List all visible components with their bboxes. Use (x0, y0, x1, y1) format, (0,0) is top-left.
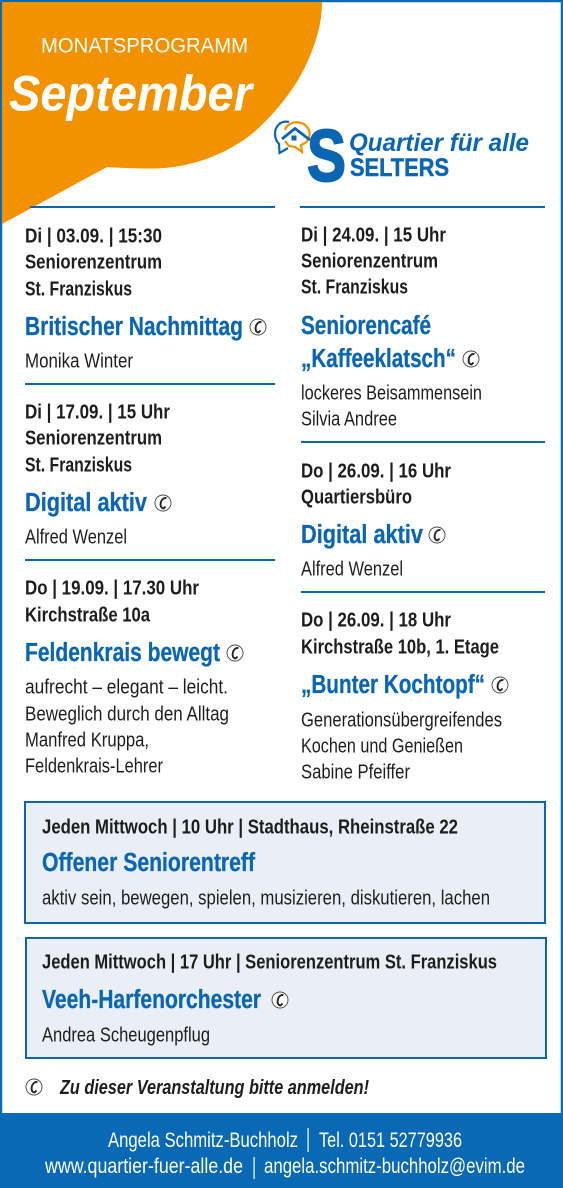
event: Seniorencafé Kaffeeklatsch: „Kaffeeklatsch“ (301, 345, 456, 373)
footer contact bar (0, 1113, 563, 1188)
logo name: Quartier für alle (349, 129, 529, 157)
logo place: SELTERS (350, 154, 449, 182)
panel: Offener Seniorentreff (25, 802, 545, 923)
registration note: Zu dieser Veranstaltung bitte anmelden! (59, 1077, 369, 1099)
panel: Offener Seniorentreff: Jeden Mittwoch | 10 Uhr | Stadthaus, Rheinstraße 22 (42, 816, 458, 838)
footer contact bar: Tel. 0151 52779936 (319, 1129, 462, 1152)
event: Bunter Kochtopf: Kirchstraße 10b, 1. Etage (301, 636, 499, 658)
event: Feldenkrais bewegt: Manfred Kruppa, (25, 729, 149, 751)
event: Seniorencafé Kaffeeklatsch: Silvia Andree (301, 408, 397, 430)
event: Seniorencafé Kaffeeklatsch: St. Franziskus (301, 276, 408, 298)
event: Britischer Nachmittag (25, 206, 275, 372)
event: Digital aktiv 26.09.: Do | 26.09. | 16 Uhr (301, 460, 451, 482)
panel: Offener Seniorentreff: Offener Seniorentreff (42, 849, 255, 877)
event: Digital aktiv 26.09.: Quartiersbüro (301, 486, 412, 508)
event: Feldenkrais bewegt: Beweglich durch den Alltag (25, 703, 229, 725)
event: Feldenkrais bewegt: Feldenkrais bewegt (25, 639, 220, 667)
event: Bunter Kochtopf: Kochen und Genießen (301, 735, 463, 757)
event: Britischer Nachmittag: Seniorenzentrum (25, 251, 162, 273)
panel: Veeh-Harfenorchester: Veeh-Harfenorchester (42, 986, 261, 1014)
event: Seniorencafé Kaffeeklatsch: Seniorencafé (301, 312, 431, 340)
event: Britischer Nachmittag: Britischer Nachmittag (25, 313, 243, 341)
event: Bunter Kochtopf (301, 591, 545, 783)
event: Bunter Kochtopf: „Bunter Kochtopf“ (301, 671, 485, 699)
event: Seniorencafé Kaffeeklatsch: lockeres Beisammensein (301, 382, 482, 404)
event: Digital aktiv 17.09. (25, 383, 275, 548)
event: Feldenkrais bewegt: aufrecht – elegant – leicht. (25, 676, 228, 698)
event: Britischer Nachmittag: Monika Winter (25, 350, 133, 372)
event: Digital aktiv 17.09.: Seniorenzentrum (25, 427, 162, 449)
event: Feldenkrais bewegt: Do | 19.09. | 17.30 Uhr (25, 577, 199, 599)
event: Digital aktiv 26.09. (301, 441, 545, 580)
event: Britischer Nachmittag: Di | 03.09. | 15:30 (25, 225, 162, 247)
big letter S: S (307, 116, 346, 197)
event: Feldenkrais bewegt: Kirchstraße 10a (25, 604, 151, 626)
heading: September: September (9, 66, 254, 122)
footer contact bar: www.quartier-fuer-alle.de (44, 1155, 243, 1178)
event: Digital aktiv 26.09.: Alfred Wenzel (301, 558, 403, 580)
event: Seniorencafé Kaffeeklatsch: Di | 24.09. | 15 Uhr (301, 224, 446, 246)
icon: speech bubbles with house (275, 122, 310, 153)
event: Feldenkrais bewegt (25, 559, 275, 777)
label: Monatsprogramm: MONATSPROGRAMM (41, 34, 248, 58)
panel: Veeh-Harfenorchester: Andrea Scheugenpflug (42, 1024, 210, 1046)
panel: Veeh-Harfenorchester (26, 938, 546, 1058)
event: Feldenkrais bewegt: Feldenkrais-Lehrer (25, 755, 163, 777)
event: Seniorencafé Kaffeeklatsch: Seniorenzentrum (301, 250, 438, 272)
event: Digital aktiv 17.09.: Di | 17.09. | 15 Uhr (25, 401, 170, 423)
event: Digital aktiv 26.09.: Digital aktiv (301, 521, 424, 549)
panel: Offener Seniorentreff: aktiv sein, bewegen, spielen, musizieren, diskutieren, lachen (42, 887, 490, 909)
event: Bunter Kochtopf: Sabine Pfeiffer (301, 761, 410, 783)
event: Seniorencafé Kaffeeklatsch (300, 206, 545, 430)
event: Digital aktiv 17.09.: St. Franziskus (25, 454, 132, 476)
event: Bunter Kochtopf: Generationsübergreifendes (301, 709, 502, 731)
event: Digital aktiv 17.09.: Digital aktiv (25, 489, 148, 517)
footer contact bar: Angela Schmitz-Buchholz (108, 1129, 298, 1152)
logo: Quartier für alle Selters (275, 116, 529, 197)
header speech bubble (2, 2, 322, 224)
event: Britischer Nachmittag: St. Franziskus (25, 278, 132, 300)
event: Digital aktiv 17.09.: Alfred Wenzel (25, 526, 127, 548)
event: Bunter Kochtopf: Do | 26.09. | 18 Uhr (301, 609, 451, 631)
